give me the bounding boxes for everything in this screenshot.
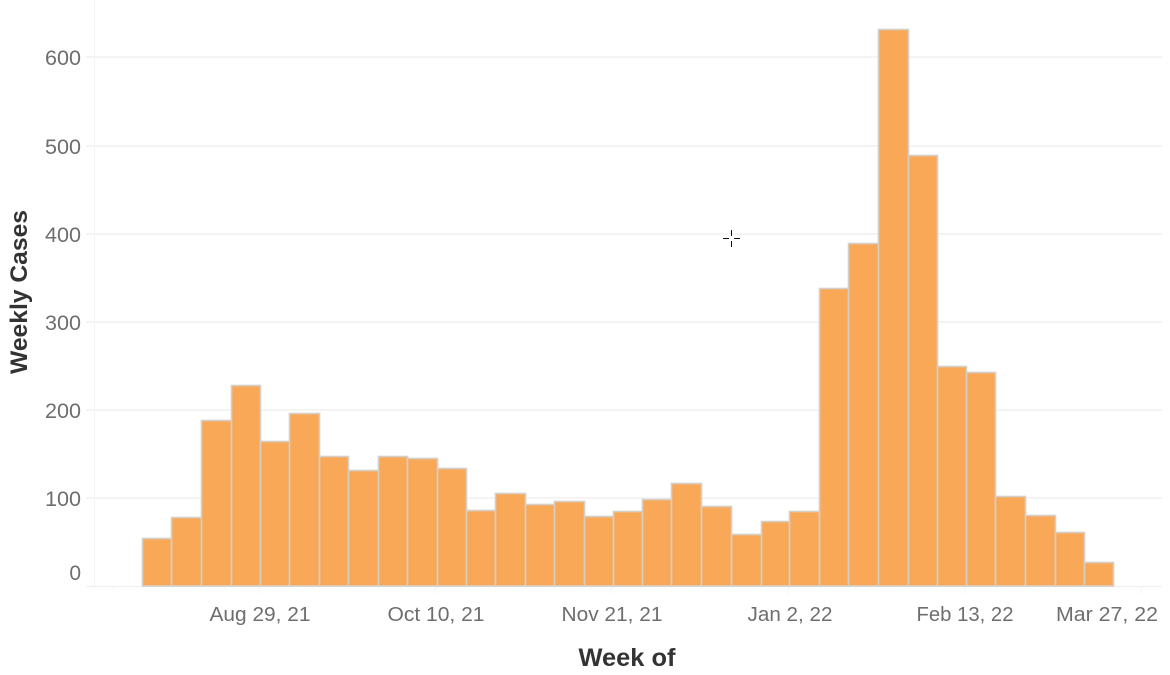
y-axis tick labels: 100 — [45, 488, 81, 511]
y-axis tick labels: 600 — [45, 47, 81, 70]
y-axis tick labels: 0 — [69, 562, 81, 585]
y-axis tick labels — [45, 47, 81, 585]
x-axis tick labels: Jan 2, 22 — [748, 604, 832, 626]
bars — [142, 30, 1114, 586]
icon: crosshair cursor — [723, 230, 740, 247]
x-axis tick labels: Nov 21, 21 — [562, 604, 662, 626]
x-axis tick labels: Oct 10, 21 — [388, 604, 484, 626]
y-axis tick labels: 300 — [45, 312, 81, 335]
y-axis tick labels: 400 — [45, 224, 81, 247]
y-axis tick labels: 200 — [45, 400, 81, 423]
x-axis tick labels: Feb 13, 22 — [916, 604, 1014, 626]
y-axis tick labels: 500 — [45, 136, 81, 159]
x-axis tick labels: Aug 29, 21 — [210, 604, 310, 626]
x-axis tick labels — [210, 604, 1158, 626]
y-axis title: Weekly Cases — [6, 210, 33, 374]
x-axis tick labels: Mar 27, 22 — [1056, 604, 1158, 626]
x-axis title: Week of — [578, 644, 676, 672]
